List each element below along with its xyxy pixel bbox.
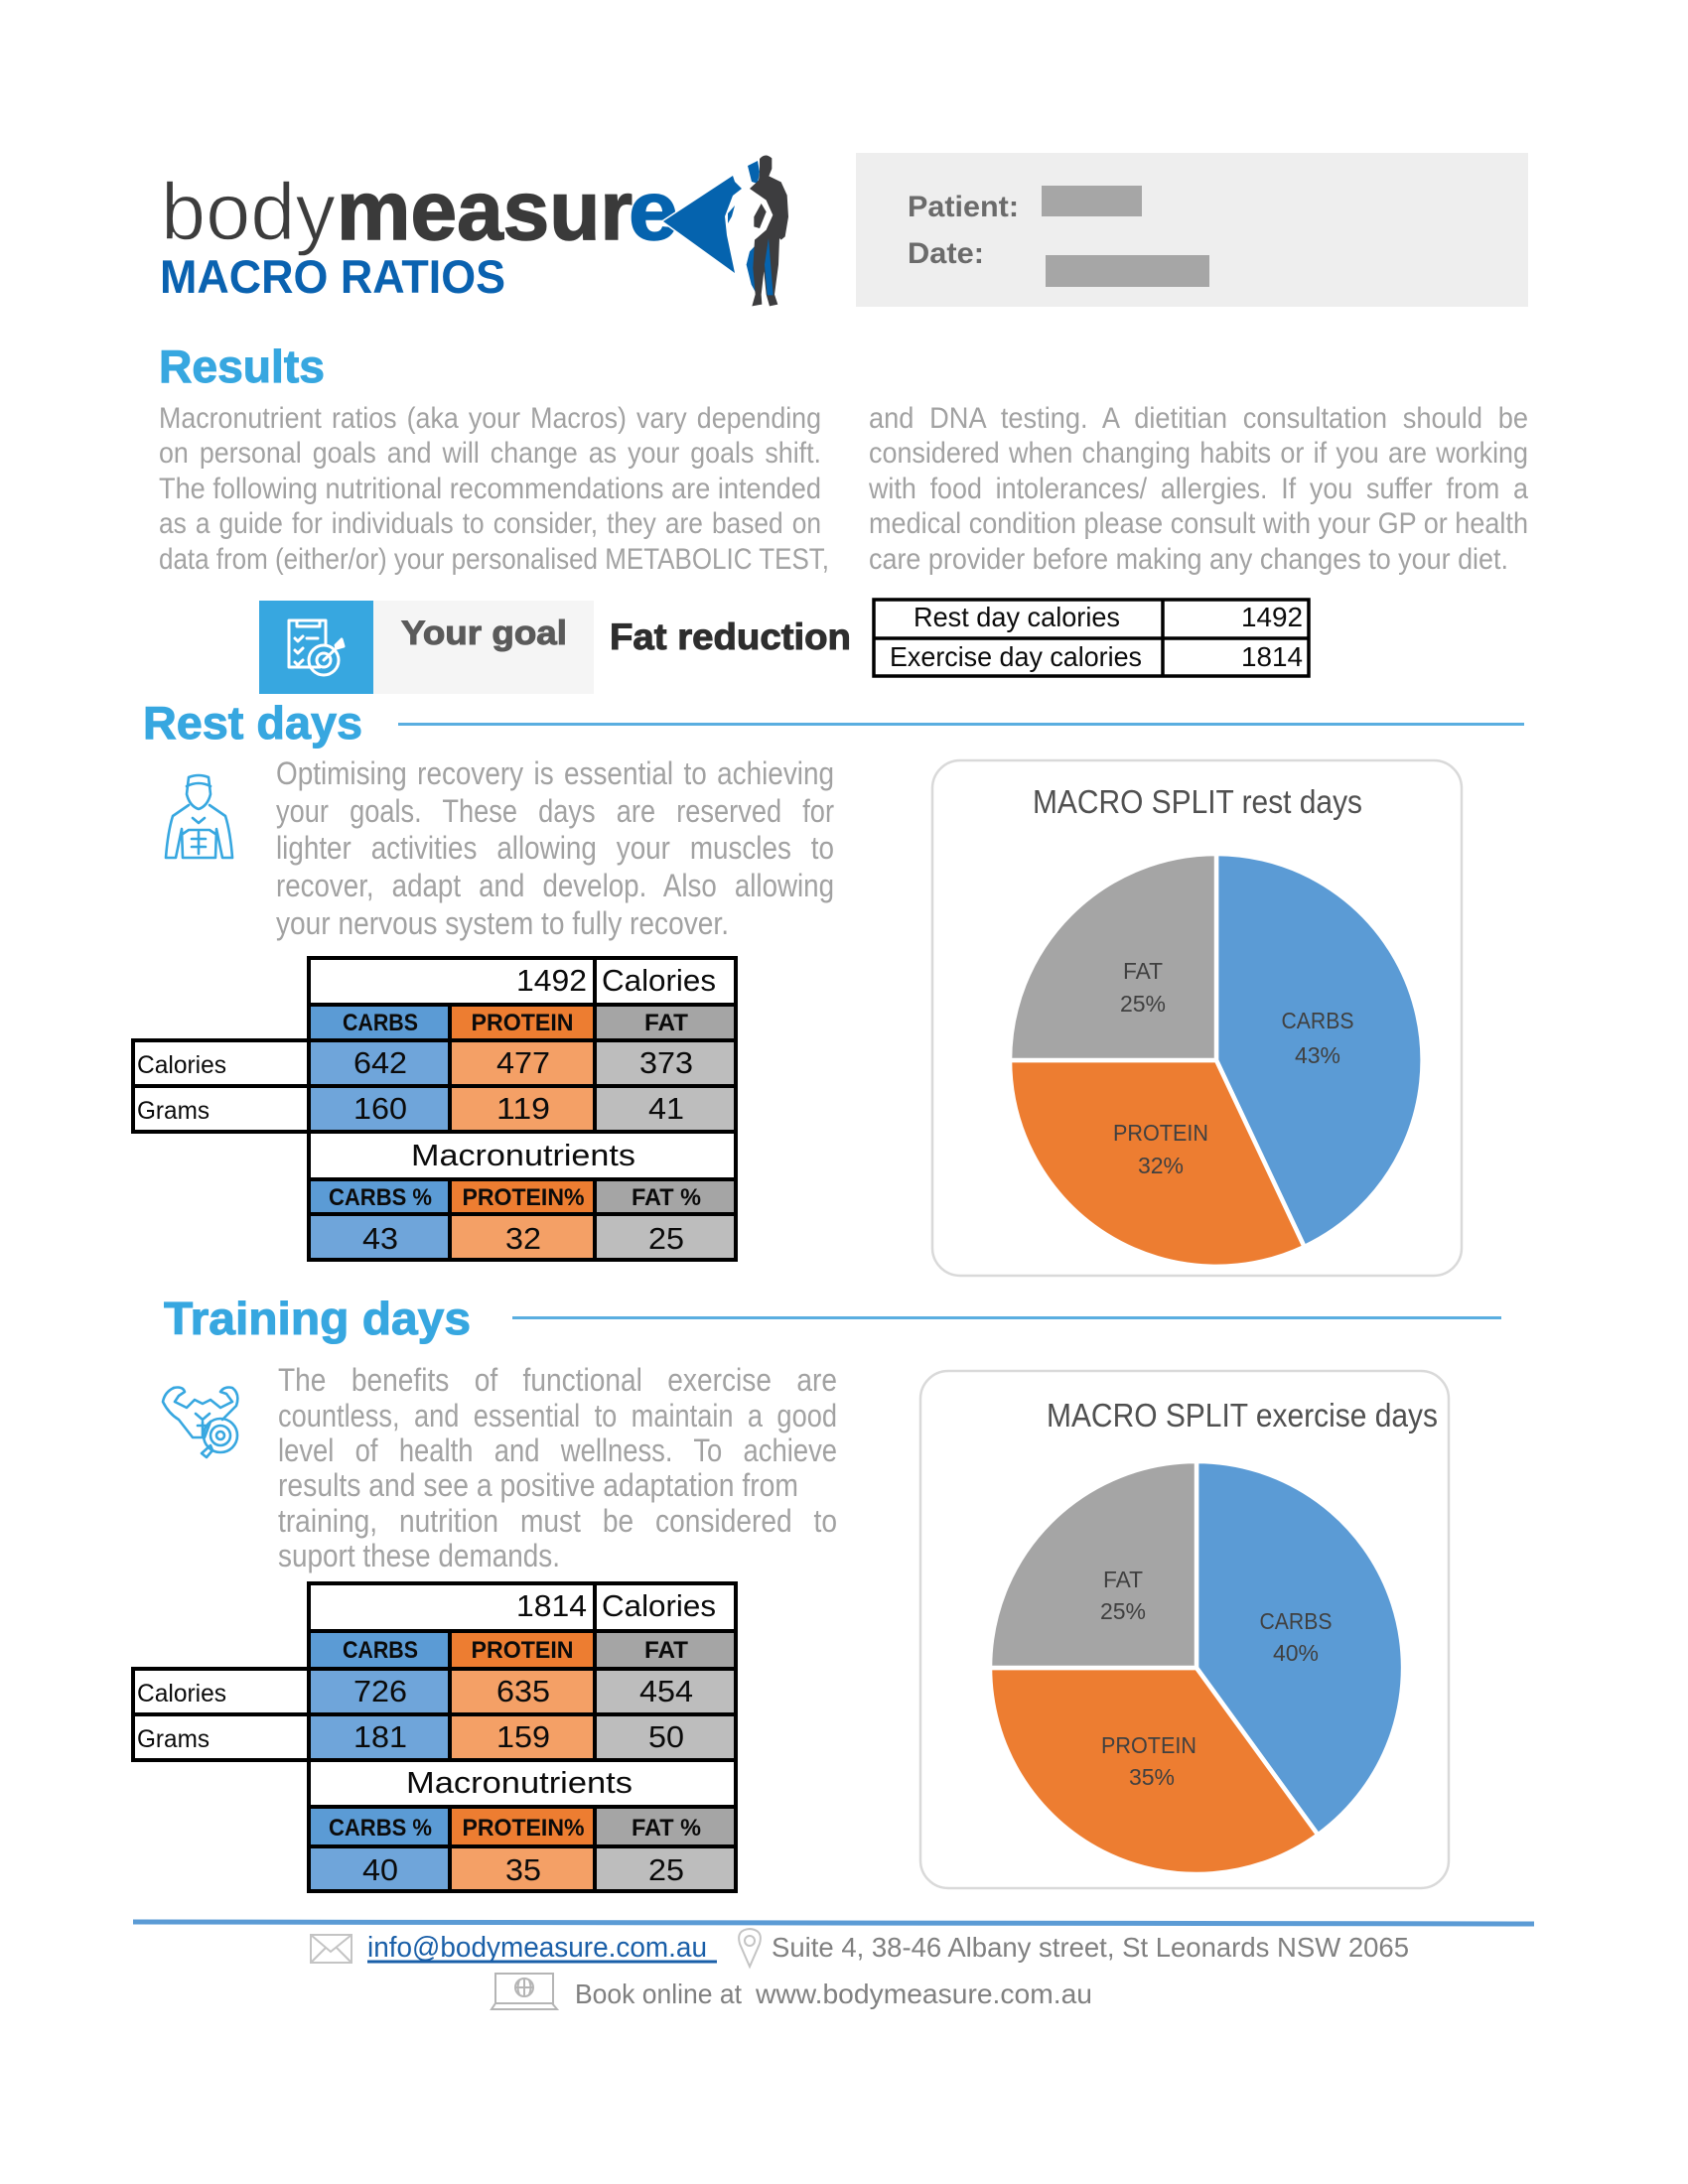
table: rest day macros: 43 (362, 1221, 398, 1256)
table: training day macros: Calories (137, 1680, 226, 1707)
logo: bodymeasure macro ratios: measur (337, 164, 633, 257)
table: training day macros: Calories (602, 1588, 716, 1623)
chart: macro split rest days: FAT (1123, 958, 1163, 984)
text block: results left column: data from (either/or) your personalised METABOLIC TEST, (159, 543, 829, 576)
logo: bodymeasure macro ratios: MACRO RATIOS (160, 250, 505, 303)
text block: training days description: The benefits of functional exercise are (278, 1362, 837, 1398)
contact: address: Suite 4, 38-46 Albany street, St Leonards NSW 2065 (772, 1932, 1409, 1963)
icon: muscular torso (166, 775, 232, 858)
table: training day macros: Grams (137, 1725, 210, 1753)
panel: patient details: Patient: (908, 191, 1019, 223)
table: daily calories: 1492 (1241, 602, 1303, 632)
logo: bodymeasure macro ratios (160, 155, 788, 306)
text block: rest days description: your nervous system to fully recover. (276, 905, 729, 941)
table: daily calories: Rest day calories (914, 602, 1120, 632)
icon: flexing body with target (163, 1388, 237, 1457)
chart: macro split exercise days: FAT (1103, 1567, 1143, 1592)
contact: book online: Book online at (575, 1979, 742, 2009)
chart: macro split exercise days: 35% (1129, 1764, 1175, 1790)
panel: your goal (259, 601, 594, 694)
chart: macro split rest days: 43% (1295, 1042, 1340, 1068)
table: rest day macros: CARBS (343, 1010, 418, 1036)
text block: results right column: and DNA testing. A dietitian consultation should be (869, 402, 1528, 435)
table: training day macros (133, 1583, 737, 1891)
table: rest day macros: 1492 (516, 963, 587, 998)
table: training day macros: 40 (362, 1852, 398, 1887)
table: rest day macros: 642 (353, 1045, 407, 1080)
icon: location pin (739, 1929, 761, 1967)
table: training day macros: 25 (648, 1852, 684, 1887)
text block: results left column: Macronutrient ratios (aka your Macros) vary depending (159, 402, 821, 435)
table: training day macros: PROTEIN% (463, 1815, 584, 1842)
text block: results left column (159, 402, 829, 576)
table: daily calories: Exercise day calories (890, 641, 1142, 672)
text block: rest days description (276, 755, 834, 941)
text block: results right column: medical condition please consult with your GP or health (869, 507, 1528, 540)
table: rest day macros: Calories (137, 1051, 226, 1079)
table: training day macros: 1814 (516, 1588, 587, 1623)
table: rest day macros: 119 (496, 1091, 550, 1126)
chart: macro split exercise days: 25% (1100, 1598, 1146, 1624)
table: training day macros: CARBS (343, 1637, 418, 1664)
icon: laptop (492, 1974, 557, 2009)
heading: rest days: Rest days (143, 697, 362, 749)
table: rest day macros: CARBS % (329, 1184, 432, 1211)
text block: rest days description: lighter activities allowing your muscles to (276, 830, 834, 866)
chart: macro split exercise days (920, 1371, 1449, 1888)
text block: rest days description: Optimising recovery is essential to achieving (276, 755, 834, 791)
table: training day macros: 454 (639, 1674, 693, 1708)
table: rest day macros: Grams (137, 1097, 210, 1125)
table: training day macros: 159 (496, 1719, 550, 1754)
contact: book online: www.bodymeasure.com.au (755, 1979, 1092, 2009)
contact: book online (575, 1979, 1092, 2009)
table: rest day macros: 32 (505, 1221, 541, 1256)
heading: training days: Training days (164, 1293, 471, 1344)
text block: training days description (278, 1362, 837, 1573)
table: training day macros: FAT (644, 1637, 688, 1664)
panel: patient details (856, 153, 1528, 307)
table: rest day macros: PROTEIN (471, 1010, 574, 1036)
table: rest day macros: Calories (602, 963, 716, 998)
text block: rest days description: your goals. These days are reserved for (276, 793, 834, 829)
table: training day macros: 181 (353, 1719, 407, 1754)
table: rest day macros: Macronutrients (411, 1138, 635, 1172)
chart: macro split exercise days: PROTEIN (1101, 1732, 1196, 1758)
table: rest day macros: 373 (639, 1045, 693, 1080)
table: training day macros: Macronutrients (406, 1765, 633, 1800)
chart: macro split rest days: CARBS (1281, 1008, 1354, 1033)
table: training day macros: 35 (505, 1852, 541, 1887)
table: rest day macros: FAT (644, 1010, 688, 1036)
panel: your goal: Your goal (401, 614, 567, 652)
table: training day macros: 726 (353, 1674, 407, 1708)
text block: rest days description: recover, adapt and develop. Also allowing (276, 868, 834, 903)
text block: results right column (868, 402, 1528, 576)
panel: patient details: Date: (908, 237, 984, 270)
table: training day macros: 50 (648, 1719, 684, 1754)
text block: training days description: results and see a positive adaptation from (278, 1467, 798, 1503)
text block: results right column: care provider before making any changes to your diet. (869, 543, 1508, 576)
table: rest day macros: 160 (353, 1091, 407, 1126)
table: daily calories (874, 600, 1309, 676)
text block: results right column: with food intolerances/ allergies. If you suffer from a (868, 473, 1528, 505)
logo: bodymeasure macro ratios: e (629, 164, 678, 257)
table: daily calories: 1814 (1241, 641, 1303, 672)
text block: results right column: considered when changing habits or if you are working (869, 437, 1528, 470)
contact: email: info@bodymeasure.com.au (367, 1932, 707, 1964)
chart: macro split rest days: 32% (1138, 1153, 1184, 1178)
chart: macro split rest days (932, 760, 1462, 1276)
table: rest day macros: FAT % (632, 1184, 701, 1211)
text block: results left column: as a guide for individuals to consider, they are based on (159, 507, 821, 540)
chart: macro split exercise days: CARBS (1259, 1608, 1333, 1634)
table: rest day macros: PROTEIN% (463, 1184, 584, 1211)
text block: results left column: on personal goals and will change as your goals shift. (159, 437, 821, 470)
goal value: fat reduction: Fat reduction (610, 616, 851, 657)
chart: macro split rest days: MACRO SPLIT rest days (1033, 783, 1362, 820)
chart: macro split exercise days: MACRO SPLIT exercise days (1047, 1397, 1438, 1433)
table: rest day macros (133, 958, 737, 1260)
table: rest day macros: 41 (648, 1091, 684, 1126)
text block: results left column: The following nutritional recommendations are intended (159, 473, 821, 505)
table: training day macros: FAT % (632, 1815, 701, 1842)
heading: results: Results (159, 341, 325, 392)
table: training day macros: PROTEIN (471, 1637, 574, 1664)
table: rest day macros: 25 (648, 1221, 684, 1256)
table: training day macros: CARBS % (329, 1815, 432, 1842)
chart: macro split exercise days: 40% (1273, 1640, 1319, 1666)
table: training day macros: 635 (496, 1674, 550, 1708)
text block: training days description: level of health and wellness. To achieve (278, 1433, 837, 1468)
table: rest day macros: 477 (496, 1045, 550, 1080)
text block: training days description: countless, and essential to maintain a good (278, 1398, 837, 1433)
text block: training days description: training, nutrition must be considered to (278, 1503, 837, 1539)
icon: envelope (311, 1935, 352, 1963)
logo: bodymeasure macro ratios: body (161, 167, 336, 257)
chart: macro split rest days: 25% (1120, 991, 1166, 1017)
chart: macro split rest days: PROTEIN (1113, 1120, 1208, 1146)
text block: training days description: suport these demands. (278, 1538, 560, 1573)
